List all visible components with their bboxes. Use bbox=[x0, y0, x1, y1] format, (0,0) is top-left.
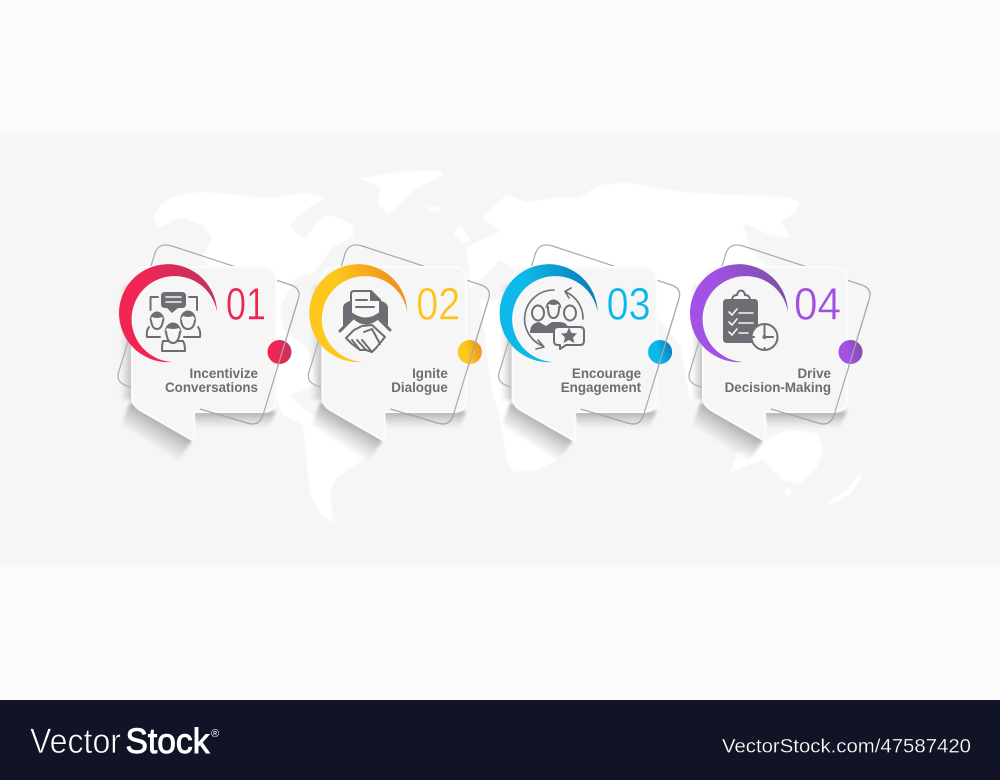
accent dot bbox=[648, 340, 672, 364]
step number 01: 01 bbox=[226, 278, 266, 330]
world map bbox=[153, 170, 862, 523]
frame right edge over card bbox=[200, 300, 298, 424]
frame right edge over card bbox=[581, 300, 679, 424]
panel: card 04 Drive Decision-Making bbox=[689, 245, 870, 461]
label: Ignite bbox=[412, 366, 448, 381]
icon: engagement people and star bbox=[525, 288, 584, 349]
card body bbox=[703, 267, 847, 441]
crescent arc bbox=[119, 264, 217, 362]
label: Engagement bbox=[561, 380, 642, 395]
card shadow bbox=[120, 285, 276, 461]
crescent arc bbox=[309, 264, 407, 362]
panel: card 02 Ignite Dialogue bbox=[308, 245, 489, 461]
label: Drive bbox=[798, 366, 831, 381]
background band bbox=[0, 135, 1000, 565]
footer bar bbox=[0, 700, 1000, 780]
footer logo: Stock bbox=[126, 722, 210, 761]
label: Incentivize bbox=[190, 366, 258, 381]
card body bbox=[322, 267, 466, 441]
card body bbox=[132, 267, 276, 441]
frame right edge over card bbox=[771, 300, 869, 424]
accent dot bbox=[458, 340, 482, 364]
accent dot bbox=[838, 340, 862, 364]
footer logo: Vector bbox=[30, 722, 121, 761]
footer logo: ® bbox=[211, 728, 219, 740]
card outline frame bbox=[308, 245, 489, 424]
card shadow bbox=[310, 285, 466, 461]
frame right edge over card bbox=[390, 300, 488, 424]
footer image id: VectorStock.com/47587420 bbox=[722, 736, 971, 758]
accent dot bbox=[268, 340, 292, 364]
icon: envelope and handshake bbox=[340, 291, 390, 352]
panel: card 03 Encourage Engagement bbox=[499, 245, 680, 461]
label: Decision-Making bbox=[725, 380, 831, 395]
step number 04: 04 bbox=[794, 278, 841, 330]
label: Encourage bbox=[572, 366, 641, 381]
card body bbox=[513, 267, 657, 441]
panel: card 01 Incentivize Conversations bbox=[118, 245, 299, 461]
label: Dialogue bbox=[391, 380, 448, 395]
crescent arc bbox=[690, 264, 788, 362]
label: Conversations bbox=[165, 380, 258, 395]
step number 03: 03 bbox=[607, 278, 651, 330]
card shadow bbox=[691, 285, 847, 461]
crescent arc bbox=[500, 264, 598, 362]
card outline frame bbox=[689, 245, 870, 424]
card outline frame bbox=[499, 245, 680, 424]
icon: group conversation bbox=[147, 292, 200, 351]
icon: clipboard and clock bbox=[723, 290, 778, 350]
card outline frame bbox=[118, 245, 299, 424]
step number 02: 02 bbox=[416, 278, 460, 330]
footer logo bbox=[30, 722, 219, 761]
card shadow bbox=[501, 285, 657, 461]
